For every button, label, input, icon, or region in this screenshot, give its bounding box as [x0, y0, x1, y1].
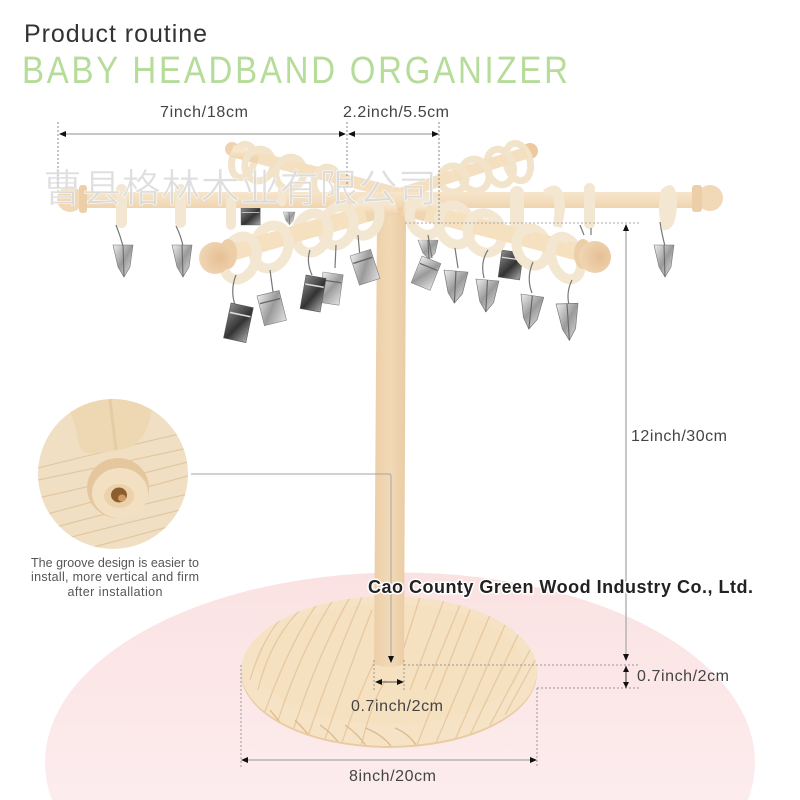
- back rod: left: [225, 142, 400, 200]
- dimension: 12inch height: 12inch/30cm: [631, 428, 727, 445]
- dimension: 7inch width: [58, 104, 346, 192]
- dimension: 8inch base: [241, 665, 537, 785]
- main rod hooks and clips: [113, 222, 674, 277]
- groove detail circle: [38, 399, 188, 549]
- left front knob: [199, 239, 237, 274]
- dimension: 0.7inch thickness: [404, 665, 729, 688]
- callout leader line: [191, 474, 394, 663]
- dimension: 2.2inch spacing: [343, 104, 449, 225]
- dimension: pole 0.7inch: 0.7inch/2cm: [351, 698, 443, 715]
- base tray: [241, 596, 537, 752]
- left front rod with rings: [199, 196, 396, 343]
- left front clips: [224, 235, 380, 343]
- groove caption: The groove design is easier to: [31, 556, 199, 570]
- right knob: [692, 185, 723, 212]
- groove caption: [31, 556, 199, 599]
- back rod: right: [400, 141, 538, 194]
- groove caption: install, more vertical and firm: [31, 570, 199, 584]
- dimension: 7inch width: 7inch/18cm: [160, 104, 248, 121]
- title: product routine: Product routine: [24, 20, 207, 48]
- center pole: [374, 197, 430, 667]
- english watermark: Cao County Green Wood Industry Co., Ltd.: [368, 577, 753, 597]
- pink backdrop ellipse: [45, 572, 755, 800]
- dimension: pole 0.7inch: [351, 660, 443, 715]
- dimension: 0.7inch thickness: 0.7inch/2cm: [637, 668, 729, 685]
- title: baby headband organizer: BABY HEADBAND ORGANIZER: [22, 49, 568, 92]
- groove: [87, 458, 149, 518]
- rings on main rod: [116, 183, 677, 230]
- back hidden clips: [241, 208, 523, 280]
- post stub: [66, 399, 153, 453]
- dimension: 12inch height: [405, 223, 727, 661]
- left knob: [57, 185, 87, 213]
- right front clips: [411, 235, 579, 341]
- groove caption: after installation: [68, 585, 163, 599]
- dimension: 8inch base: 8inch/20cm: [349, 768, 436, 785]
- chinese watermark: 曹县格林木业有限公司: [43, 168, 437, 211]
- main horizontal rod: [57, 183, 723, 230]
- right front knob: [574, 239, 611, 273]
- right front rod with rings: [404, 195, 611, 341]
- dimension: 2.2inch spacing: 2.2inch/5.5cm: [343, 104, 449, 121]
